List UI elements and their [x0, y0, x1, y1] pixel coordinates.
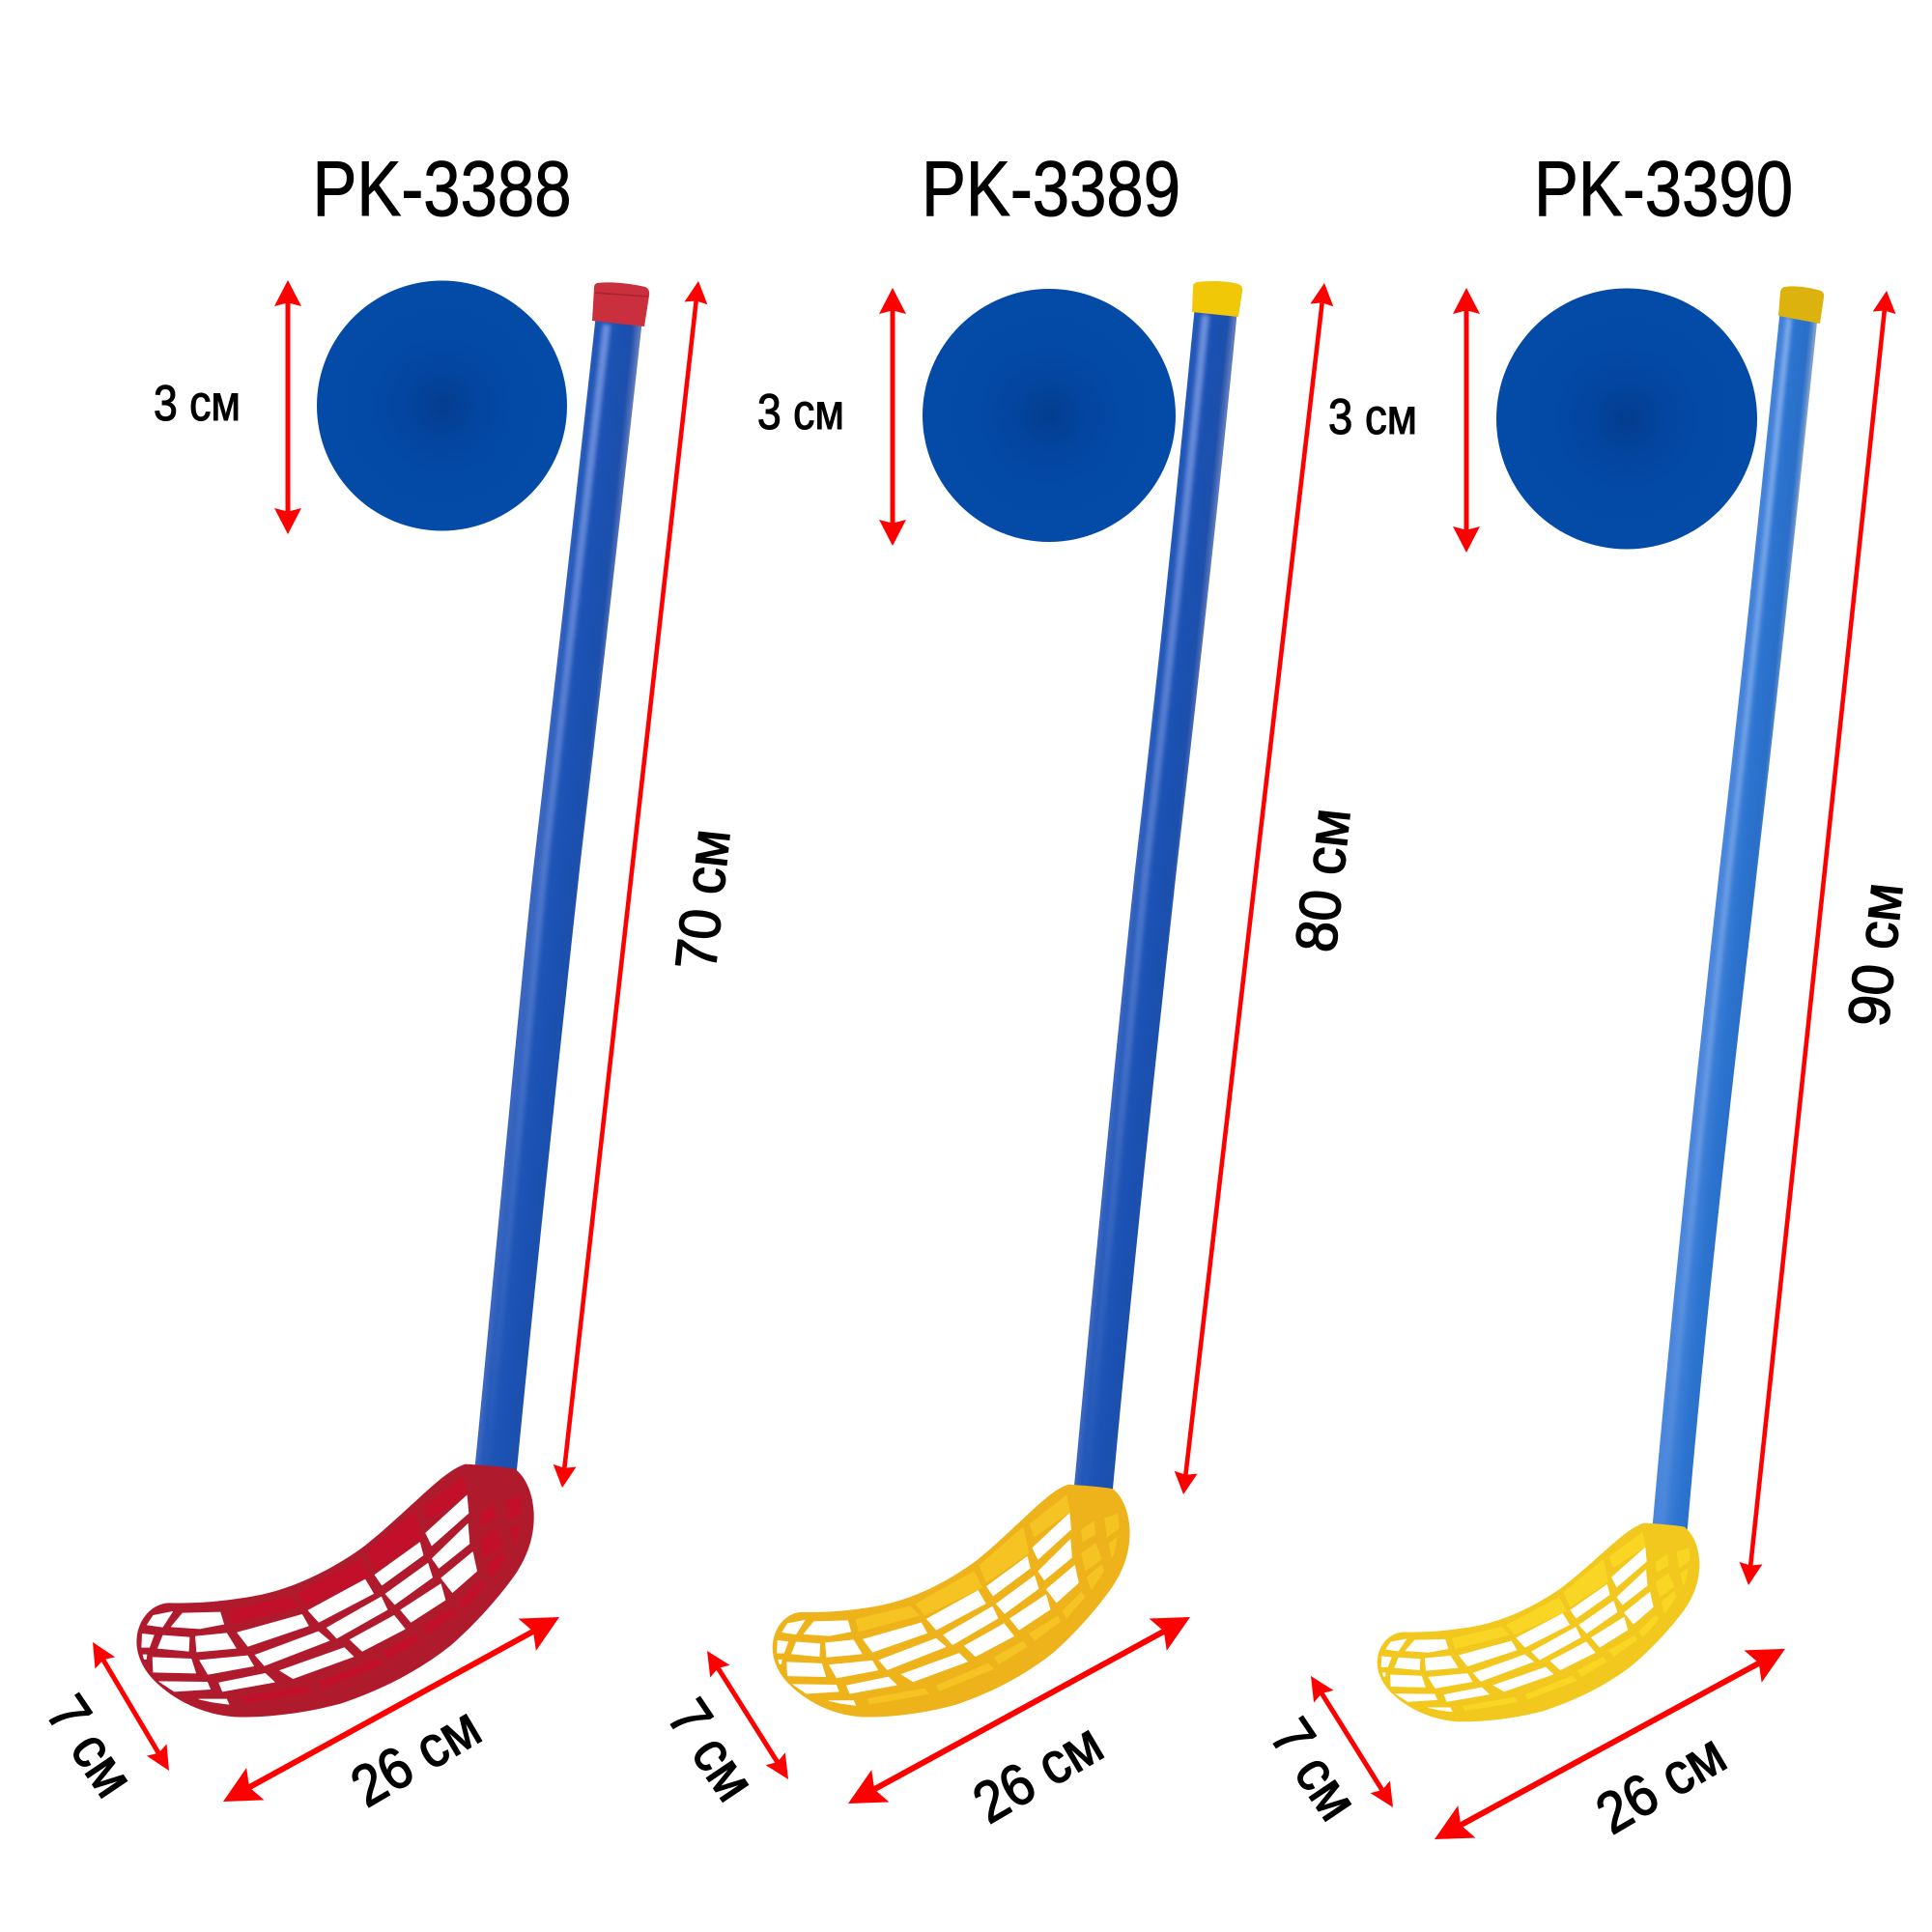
arrow: blade width: [697, 1645, 798, 1785]
arrow: stick length: [1737, 290, 1898, 1586]
arrow: blade length: [214, 1601, 568, 1818]
arrow: ball diameter: [1453, 288, 1480, 553]
arrow: stick length: [551, 280, 710, 1489]
arrow: blade length: [839, 1601, 1199, 1820]
label: 7 cm: 7 см: [1258, 1707, 1371, 1832]
blade: yellow: [1378, 1523, 1699, 1721]
stick: blue shaft with yellow cap: [1073, 281, 1242, 1499]
label: 3 cm: 3 см: [154, 376, 241, 432]
label: 7 cm: 7 см: [655, 1688, 768, 1812]
stick: blue shaft with yellow cap: [1652, 286, 1824, 1538]
heading: PK-3388: PK-3388: [313, 146, 572, 233]
arrow: blade width: [83, 1636, 179, 1776]
label: 26 cm: 26 см: [962, 1711, 1113, 1835]
heading: PK-3389: PK-3389: [922, 146, 1180, 233]
ball: blue: [317, 280, 567, 531]
label: 7 cm: 7 см: [34, 1684, 147, 1808]
label: 26 cm: 26 см: [1585, 1721, 1736, 1846]
ball: blue: [923, 289, 1176, 542]
arrow: blade width: [1301, 1670, 1403, 1813]
label: 26 cm: 26 см: [340, 1694, 491, 1819]
arrow: ball diameter: [274, 280, 301, 534]
arrow: stick length: [1172, 282, 1336, 1495]
label: 80 cm: 80 см: [1283, 805, 1363, 955]
label: 3 cm: 3 см: [1328, 389, 1417, 445]
label: 70 cm: 70 см: [664, 826, 742, 973]
label: 3 cm: 3 см: [757, 384, 844, 440]
heading: PK-3390: PK-3390: [1534, 146, 1793, 233]
panel: PK-3388: [34, 146, 742, 1819]
panel: PK-3389: [655, 146, 1363, 1835]
blade: yellow: [773, 1485, 1130, 1717]
blade: red: [136, 1464, 534, 1717]
panel: PK-3390: [1258, 146, 1916, 1856]
arrow: ball diameter: [879, 288, 906, 546]
label: 90 cm: 90 см: [1835, 879, 1916, 1030]
ball: blue: [1496, 288, 1757, 549]
stick: blue shaft with red cap: [474, 282, 649, 1480]
arrow: blade length: [1426, 1633, 1794, 1856]
